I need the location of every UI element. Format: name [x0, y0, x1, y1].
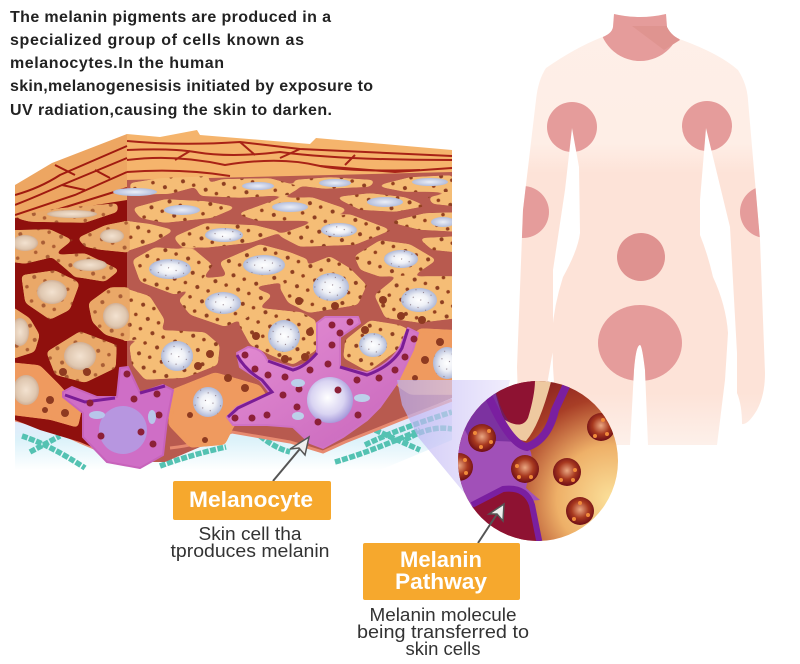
intro paragraph: The melanin pigments are produced in a — [10, 9, 331, 26]
stratum corneum left face — [15, 134, 127, 218]
lens interior — [458, 381, 618, 541]
intro paragraph — [10, 9, 373, 119]
arrow: melanocyte — [273, 437, 309, 481]
caption: Melanin Pathway: skin cells — [406, 639, 480, 659]
magnified view: melanin pathway — [458, 381, 618, 541]
intro paragraph: skin,melanogenesisis initiated by exposure to — [10, 78, 373, 95]
melanin granules — [445, 413, 615, 525]
label: Melanocyte: Melanocyte — [189, 487, 313, 512]
melanocyte left — [63, 367, 173, 468]
label: Melanin Pathway — [363, 543, 520, 600]
round nuclei — [149, 223, 461, 417]
caption: Melanin Pathway: Melanin molecule — [370, 605, 516, 625]
label: Melanin Pathway: Pathway — [395, 569, 488, 594]
caption: Melanin Pathway — [357, 605, 529, 659]
large melanin granules — [42, 296, 444, 443]
arrow: melanin pathway — [478, 504, 504, 543]
nuclei on left face — [11, 210, 129, 405]
skin cross-section block — [10, 130, 461, 470]
caption: Melanocyte — [170, 524, 330, 561]
intro paragraph: UV radiation,causing the skin to darken. — [10, 102, 332, 119]
keratinocyte speckles left — [10, 203, 130, 383]
stratum corneum right face — [127, 130, 452, 180]
keratinocyte speckles right — [122, 175, 460, 380]
intro paragraph: melanocytes.In the human — [10, 55, 224, 72]
body silhouette — [517, 14, 765, 445]
label: Melanin Pathway: Melanin — [400, 547, 482, 572]
caption: Melanin Pathway: being transferred to — [357, 622, 529, 642]
caption: Melanocyte: Skin cell tha — [198, 524, 303, 544]
intro paragraph: specialized group of cells known as — [10, 32, 304, 49]
right face tissue — [127, 165, 452, 462]
spots — [522, 14, 760, 380]
body figure with hyperpigmentation spots — [517, 14, 765, 445]
label: Melanocyte — [173, 481, 331, 520]
keratinocytes right face — [122, 175, 460, 380]
magnifier cone — [397, 380, 510, 500]
melanocyte right — [227, 317, 418, 448]
left face tissue — [15, 200, 127, 447]
keratinocytes left face — [10, 203, 130, 383]
lower edge of epidermis — [15, 398, 452, 454]
caption: Melanocyte: tproduces melanin — [170, 541, 330, 561]
lower orange cells — [10, 328, 460, 448]
nuclei speckle — [149, 223, 461, 417]
dermis with collagen fibres — [15, 395, 452, 470]
flat nuclei — [113, 178, 455, 227]
